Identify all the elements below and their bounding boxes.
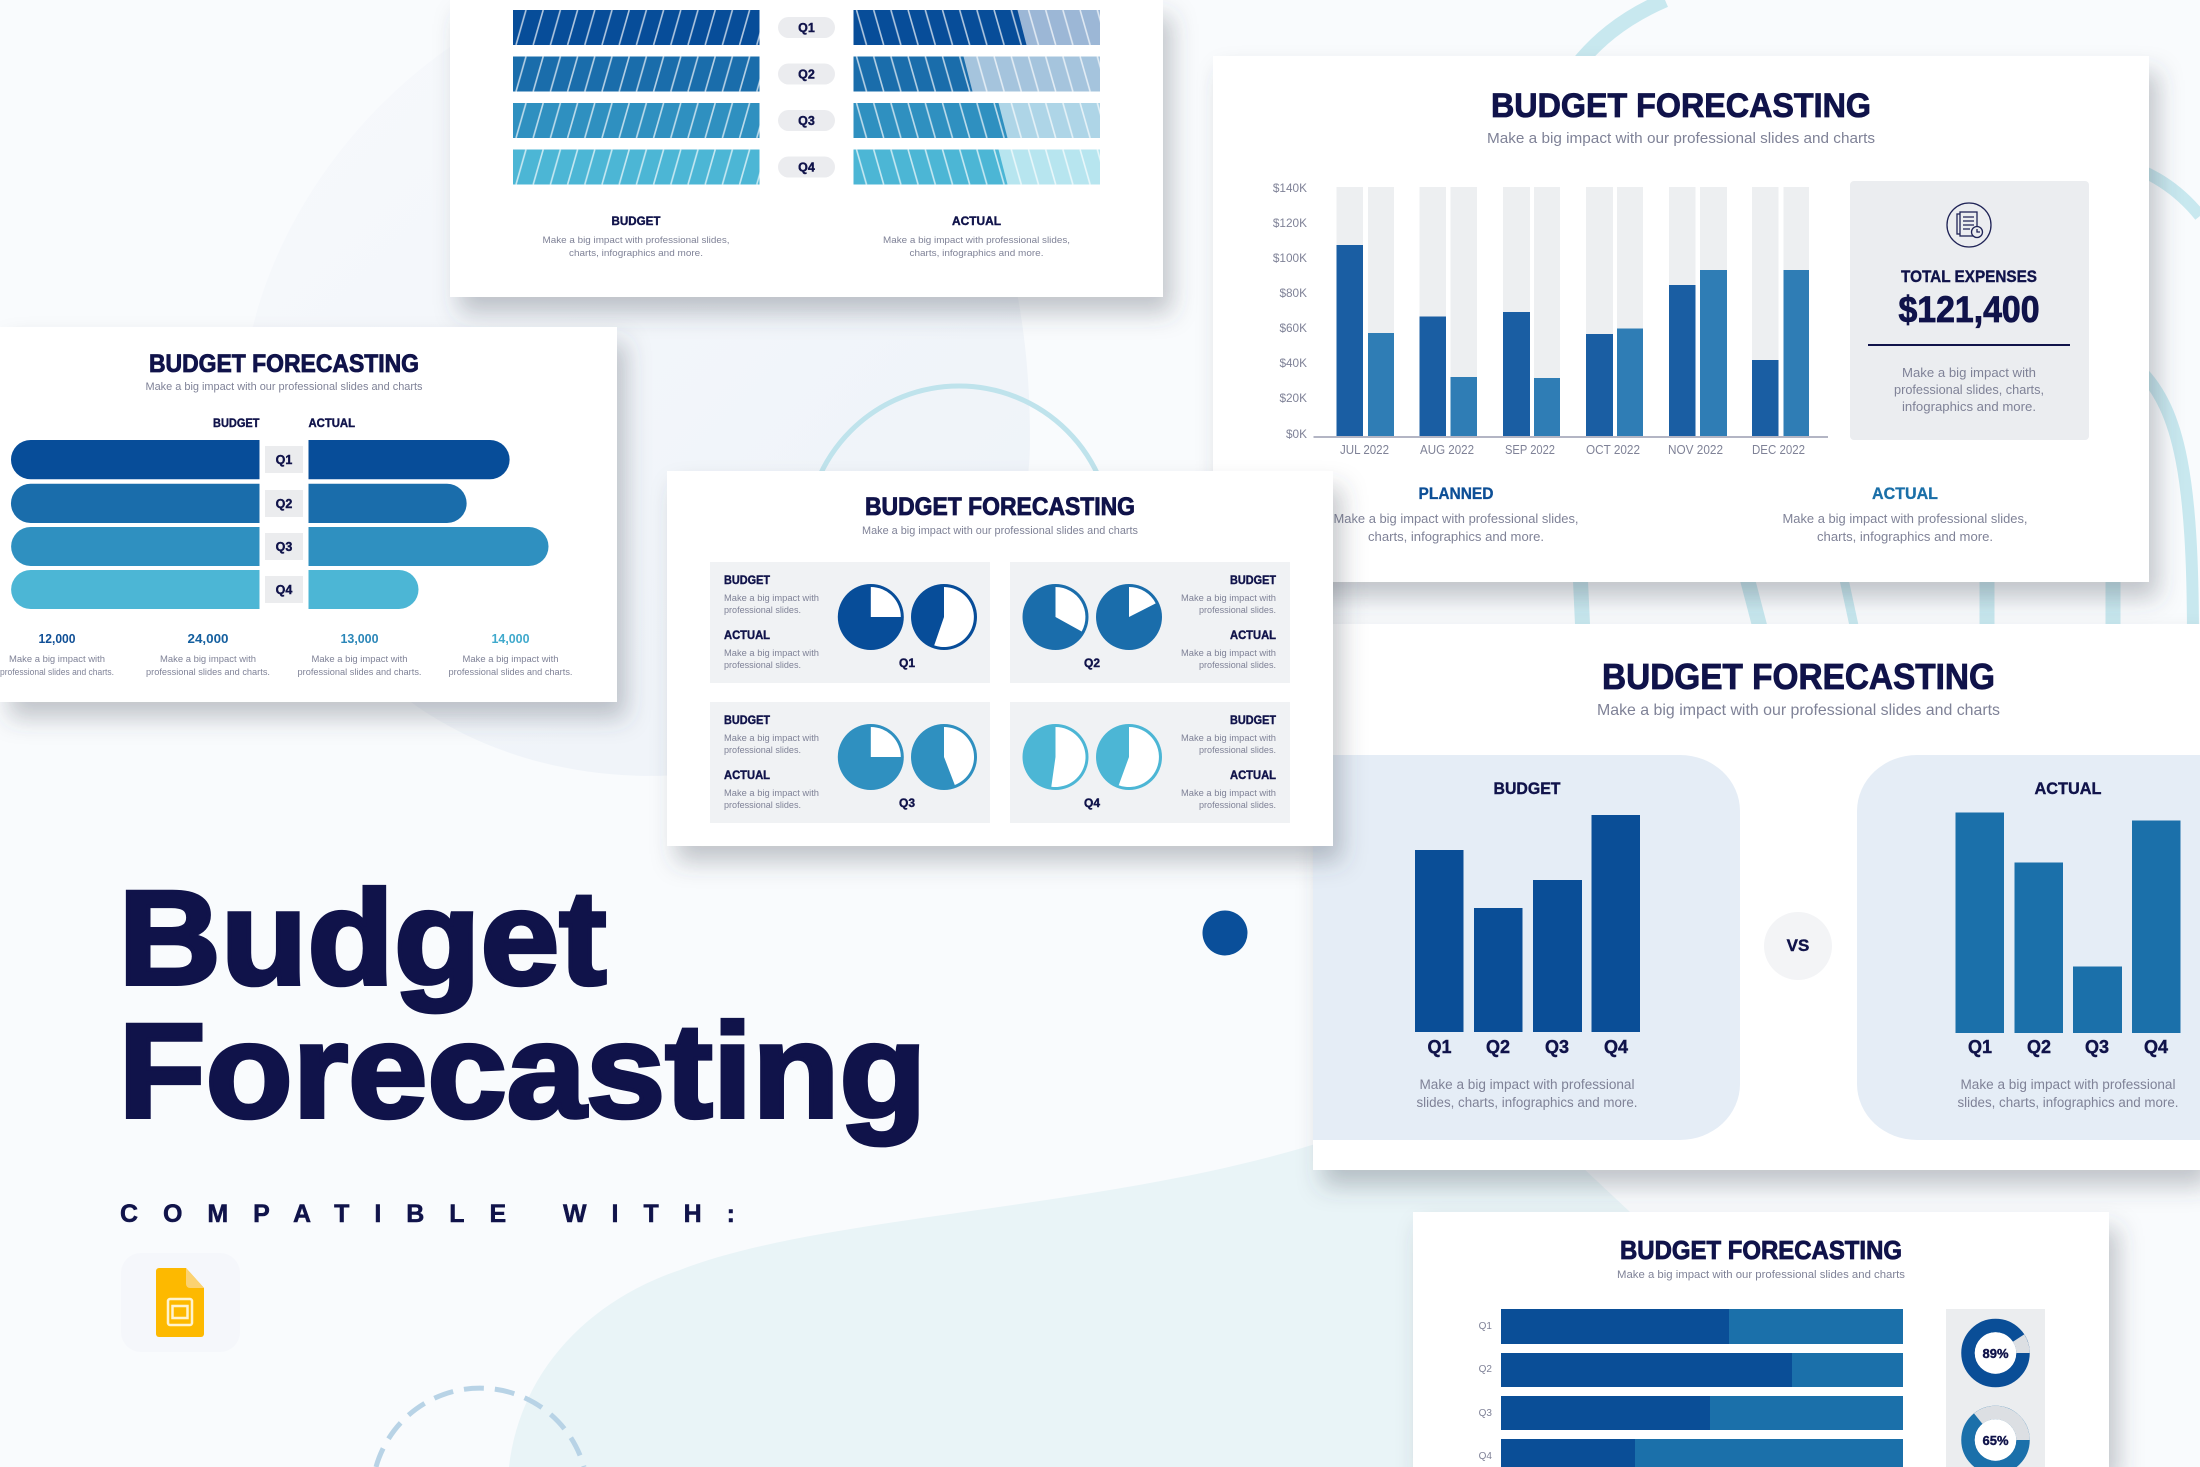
Q2 panel: professional slides. [1199, 605, 1276, 615]
icon: documents with clock [1947, 203, 1991, 247]
x axis labels: SEP 2022 [1505, 443, 1555, 457]
y axis labels: $120K [1273, 216, 1307, 230]
panel: hatched budget vs actual slide [450, 0, 1163, 297]
bar chart tracks [1336, 187, 1809, 437]
quarter pills: Q2 [798, 68, 815, 82]
subheading: Make a big impact with our professional slides and charts [1617, 1269, 1906, 1281]
quarter pills: Q1 [798, 21, 815, 35]
quarter boxes: Q1 [276, 453, 292, 467]
Q2 panel: Make a big impact with [1181, 593, 1276, 603]
x axis labels: DEC 2022 [1752, 443, 1805, 457]
y axis labels: $80K [1279, 286, 1307, 300]
Q3 panel: Q3 [899, 796, 915, 810]
planned caption: Make a big impact with professional slides, [1334, 511, 1578, 526]
x axis labels: OCT 2022 [1586, 443, 1640, 457]
actual caption: ACTUAL [952, 214, 1001, 228]
row labels [1479, 1321, 1492, 1462]
value 13,000 [298, 631, 422, 677]
donut 89% [1968, 1326, 2023, 1380]
Q4 panel: BUDGET [1230, 715, 1276, 727]
Q3 panel: ACTUAL [724, 770, 770, 782]
total expenses description: infographics and more. [1902, 399, 2036, 414]
Q4 panel: professional slides. [1199, 745, 1276, 755]
quarter boxes: Q2 [276, 497, 292, 511]
actual panel [1857, 755, 2200, 1140]
panel: monthly planned vs actual chart slide [1213, 56, 2149, 582]
background blob: lower [509, 1090, 1650, 1467]
budget description [1416, 1077, 1638, 1110]
actual description [1958, 1077, 2178, 1110]
actual caption: charts, infographics and more. [910, 248, 1044, 259]
Q1 panel: professional slides. [724, 660, 801, 670]
stacked bars [1501, 1309, 1903, 1467]
Q1 panel: Make a big impact with [724, 593, 819, 603]
value 14,000: professional slides and charts. [448, 667, 572, 677]
value 14,000: 14,000 [492, 631, 530, 646]
y axis labels: $60K [1279, 321, 1307, 335]
Q3 panel: BUDGET [724, 715, 770, 727]
actual caption: Make a big impact with professional slides, [1782, 511, 2028, 526]
actual description: slides, charts, infographics and more. [1958, 1095, 2178, 1110]
Q4 panel [1010, 702, 1290, 823]
pie: Q3 actual [911, 724, 977, 790]
heading: BUDGET FORECASTING [865, 493, 1135, 521]
y axis labels: $40K [1279, 356, 1307, 370]
pie: Q4 actual [1096, 724, 1162, 790]
value 14,000 [448, 631, 572, 677]
main title: Forecasting [118, 997, 926, 1146]
heading: BUDGET FORECASTING [1620, 1235, 1902, 1265]
total expenses label: TOTAL EXPENSES [1901, 267, 2037, 286]
value 24,000: 24,000 [188, 631, 228, 646]
budget quarter labels: Q1 [1427, 1037, 1452, 1057]
vs badge: VS [1787, 936, 1809, 955]
panel: rounded bars slide [0, 327, 617, 702]
heading: BUDGET FORECASTING [1491, 87, 1871, 125]
budget caption: Make a big impact with professional slides, [542, 235, 730, 246]
actual quarter labels: Q3 [2085, 1037, 2109, 1057]
quarter pills: Q4 [798, 160, 815, 174]
budget quarter labels [1427, 1037, 1628, 1057]
compatible with label: COMPATIBLE WITH: [120, 1200, 735, 1228]
value 12,000: professional slides and charts. [0, 667, 114, 677]
y axis labels: $0K [1286, 427, 1307, 441]
quarter boxes: Q3 [276, 540, 292, 554]
quarter boxes [265, 446, 303, 603]
Q1 panel: Q1 [899, 656, 915, 670]
Q4 panel: Q4 [1084, 796, 1100, 810]
value 13,000: 13,000 [340, 631, 378, 646]
value 24,000: Make a big impact with [160, 654, 256, 664]
budget caption [542, 214, 730, 259]
budget column chart [1415, 815, 1640, 1032]
planned caption [1334, 485, 1578, 544]
Q3 panel [710, 702, 990, 823]
row labels: Q3 [1479, 1408, 1492, 1419]
icon: google slides [121, 1253, 240, 1352]
budget hatched bars [513, 10, 760, 184]
Q3 panel: Make a big impact with [724, 788, 819, 798]
Q4 panel: ACTUAL [1230, 770, 1276, 782]
main title: Budget [118, 864, 606, 1013]
subheading: Make a big impact with our professional slides and charts [1487, 130, 1875, 147]
background blob: upper [249, 0, 1030, 776]
pie: Q1 actual [911, 584, 977, 650]
vs badge [1764, 912, 1832, 980]
subheading: Make a big impact with our professional slides and charts [146, 381, 423, 393]
actual caption: Make a big impact with professional slides, [883, 235, 1070, 246]
decorative ring behind pie slide [806, 386, 1112, 692]
actual caption [1782, 485, 2028, 544]
donut 65% [1968, 1412, 2023, 1467]
quarter pills: Q3 [798, 114, 815, 128]
y axis labels: $140K [1273, 181, 1307, 195]
pie: Q2 budget [1022, 584, 1088, 650]
x axis labels: NOV 2022 [1668, 443, 1723, 457]
actual caption [883, 214, 1070, 259]
actual caption: charts, infographics and more. [1817, 529, 1993, 544]
y axis labels: $100K [1273, 251, 1307, 265]
x axis labels [1340, 443, 1805, 457]
budget quarter labels: Q4 [1604, 1037, 1628, 1057]
Q2 panel: Q2 [1084, 656, 1100, 670]
value 13,000: Make a big impact with [312, 654, 408, 664]
total expenses description: professional slides, charts, [1894, 382, 2044, 397]
panel: stacked bars and donuts slide [1413, 1212, 2109, 1467]
Q2 panel: Make a big impact with [1181, 648, 1276, 658]
planned caption: charts, infographics and more. [1368, 529, 1544, 544]
row labels: Q1 [1479, 1321, 1492, 1332]
y axis labels [1273, 181, 1307, 441]
heading: BUDGET FORECASTING [1602, 656, 1995, 697]
actual quarter labels: Q1 [1968, 1037, 1992, 1057]
total expenses description: Make a big impact with [1902, 365, 2036, 380]
donut 65%: 65% [1982, 1433, 2009, 1448]
donut 89%: 89% [1982, 1346, 2009, 1361]
budget quarter labels: Q3 [1545, 1037, 1569, 1057]
main title [118, 864, 926, 1146]
value 14,000: Make a big impact with [462, 654, 558, 664]
actual quarter labels: Q2 [2027, 1037, 2051, 1057]
Q1 panel: professional slides. [724, 605, 801, 615]
accent dot [1202, 910, 1248, 956]
budget quarter labels: Q2 [1486, 1037, 1510, 1057]
x axis labels: AUG 2022 [1420, 443, 1474, 457]
Q1 panel [710, 562, 990, 683]
Q3 panel: Make a big impact with [724, 733, 819, 743]
budget caption: charts, infographics and more. [569, 248, 703, 259]
row labels: Q2 [1479, 1364, 1492, 1375]
quarter pills [778, 17, 835, 178]
budget description: slides, charts, infographics and more. [1416, 1095, 1638, 1110]
panel: pie charts slide [667, 471, 1333, 846]
actual bars [1368, 270, 1809, 437]
column labels [213, 418, 355, 430]
actual quarter labels: Q4 [2144, 1037, 2168, 1057]
pie: Q2 actual [1096, 584, 1162, 650]
budget description: Make a big impact with professional [1420, 1077, 1634, 1092]
panel: budget vs actual column charts slide [1313, 624, 2200, 1170]
y axis labels: $20K [1279, 391, 1307, 405]
actual description: Make a big impact with professional [1960, 1077, 2176, 1092]
Q4 panel: Make a big impact with [1181, 733, 1276, 743]
budget caption: BUDGET [612, 214, 661, 228]
value 24,000: professional slides and charts. [146, 667, 270, 677]
Q1 panel: BUDGET [724, 575, 770, 587]
decorative curves [1560, 0, 2200, 640]
budget bars [11, 440, 260, 609]
total expenses description [1894, 365, 2044, 414]
Q3 panel: professional slides. [724, 800, 801, 810]
budget label: BUDGET [1494, 779, 1561, 798]
actual hatched bars [854, 10, 1100, 184]
value 24,000 [146, 631, 270, 677]
Q4 panel: Make a big impact with [1181, 788, 1276, 798]
value 12,000 [0, 631, 114, 677]
actual caption: ACTUAL [1872, 485, 1938, 503]
heading: BUDGET FORECASTING [149, 350, 419, 378]
pie: Q4 budget [1022, 724, 1088, 790]
Q2 panel: ACTUAL [1230, 630, 1276, 642]
actual quarter labels [1968, 1037, 2168, 1057]
column labels: BUDGET [213, 418, 260, 430]
Q2 panel [1010, 562, 1290, 683]
x axis labels: JUL 2022 [1340, 443, 1389, 457]
subheading: Make a big impact with our professional slides and charts [1597, 702, 2000, 719]
donut panel [1946, 1309, 2045, 1467]
Q4 panel: professional slides. [1199, 800, 1276, 810]
total expenses value: $121,400 [1898, 289, 2040, 330]
Q3 panel: professional slides. [724, 745, 801, 755]
Q2 panel: professional slides. [1199, 660, 1276, 670]
quarter boxes: Q4 [276, 583, 292, 597]
planned bars [1336, 245, 1778, 437]
value 12,000: Make a big impact with [9, 654, 105, 664]
Q1 panel: ACTUAL [724, 630, 770, 642]
subheading: Make a big impact with our professional slides and charts [862, 525, 1138, 537]
actual column chart [1956, 812, 2180, 1033]
pie: Q3 budget [838, 724, 904, 790]
actual label: ACTUAL [2034, 779, 2102, 798]
value 13,000: professional slides and charts. [298, 667, 422, 677]
value 12,000: 12,000 [38, 631, 76, 646]
actual bars [308, 440, 548, 609]
total expenses card [1850, 181, 2089, 440]
Q1 panel: Make a big impact with [724, 648, 819, 658]
pie: Q1 budget [838, 584, 904, 650]
planned caption: PLANNED [1418, 485, 1494, 503]
row labels: Q4 [1479, 1451, 1492, 1462]
budget panel [1313, 755, 1740, 1140]
dashed circle [376, 1388, 584, 1467]
Q2 panel: BUDGET [1230, 575, 1276, 587]
column labels: ACTUAL [308, 418, 355, 430]
